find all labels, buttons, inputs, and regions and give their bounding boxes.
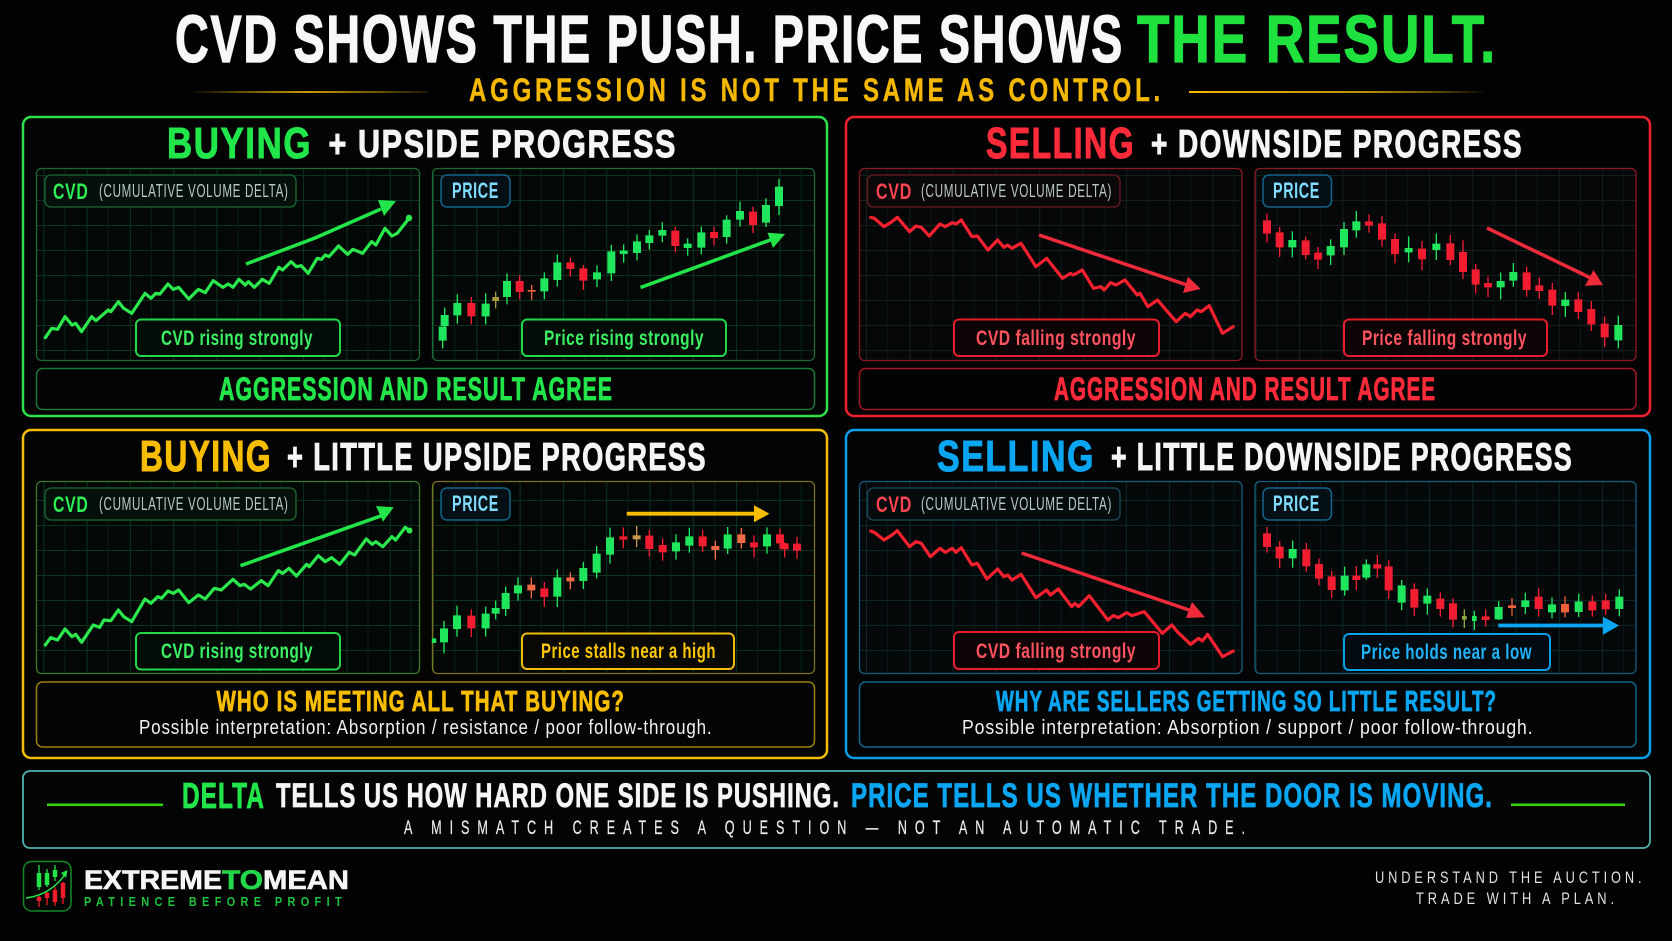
panel: delta takeaway (23, 771, 1650, 848)
logo: ExtremeToMean (24, 862, 349, 911)
arrow: price sideways (627, 505, 770, 522)
CVD line (871, 217, 1233, 333)
badge: PRICE (1263, 175, 1332, 207)
accent line left (47, 804, 163, 806)
label: CVD rising strongly (136, 320, 340, 356)
label: CVD falling strongly (954, 632, 1159, 669)
badge: CVD: (CUMULATIVE VOLUME DELTA) (921, 494, 1112, 514)
arrow: CVD down (1039, 235, 1201, 293)
accent line right (1511, 804, 1625, 806)
heading: buying upside (167, 119, 677, 168)
badge: CVD: (CUMULATIVE VOLUME DELTA) (99, 181, 288, 201)
badge: CVD: (CUMULATIVE VOLUME DELTA) (99, 494, 288, 514)
arrow: CVD up (246, 200, 396, 264)
title: THE RESULT. (1137, 2, 1497, 77)
arrow: price sideways (1498, 617, 1619, 635)
panel: selling + downside progress (846, 117, 1650, 416)
arrow: price down (1487, 228, 1603, 286)
callout: why are sellers getting so little result: Possible interpretation: Absorption / support / poor follow-through. (962, 717, 1534, 739)
arrow: CVD down (1022, 553, 1205, 618)
takeaway headline: TELLS US HOW HARD ONE SIDE IS PUSHING. (276, 777, 840, 815)
heading: selling little downside: SELLING (937, 432, 1095, 481)
chart: price falling (1255, 168, 1636, 360)
wordmark: MEAN (263, 865, 349, 895)
badge: PRICE (1263, 488, 1332, 520)
callout: who is meeting all that buying: WHO IS MEETING ALL THAT BUYING? (216, 686, 625, 718)
label: CVD rising strongly (136, 633, 340, 670)
badge: PRICE: PRICE (452, 491, 499, 516)
callout: who is meeting all that buying (36, 682, 814, 747)
panel: buying + upside progress (23, 117, 827, 416)
chart: price rising (432, 168, 814, 360)
chart: price stalls (432, 482, 814, 674)
badge: CVD: (CUMULATIVE VOLUME DELTA) (921, 181, 1112, 201)
chart: CVD falling (860, 168, 1242, 360)
badge: PRICE: PRICE (1273, 491, 1320, 516)
badge: CVD: CVD (53, 492, 88, 517)
CVD line (45, 527, 412, 645)
heading: buying little upside (140, 432, 707, 481)
wordmark: EXTREME (84, 865, 222, 895)
label: CVD rising strongly: CVD rising strongly (161, 640, 313, 663)
takeaway headline (182, 775, 1493, 816)
label: CVD rising strongly: CVD rising strongly (161, 327, 313, 350)
label: price stalls near a high: Price stalls near a high (541, 640, 716, 663)
badge: PRICE (441, 488, 510, 520)
tagline: PATIENCE BEFORE PROFIT (84, 894, 347, 909)
badge: CVD (45, 488, 296, 520)
heading: buying upside: BUYING (167, 119, 312, 168)
heading: selling little downside (937, 432, 1573, 481)
callout: aggression and result agree (860, 368, 1636, 410)
panel: buying + little upside progress (23, 430, 827, 758)
heading: buying little upside: + LITTLE UPSIDE PROGRESS (287, 436, 707, 479)
label: price rising strongly: Price rising strongly (544, 327, 704, 350)
heading: buying upside: + UPSIDE PROGRESS (328, 123, 677, 166)
takeaway headline: DELTA (182, 775, 265, 816)
callout: aggression and result agree (36, 368, 814, 410)
label: price holds near a low (1344, 634, 1550, 670)
candlesticks: rising (443, 179, 779, 348)
badge: PRICE: PRICE (452, 178, 499, 203)
wordmark (84, 865, 349, 895)
label: price falling strongly (1344, 320, 1547, 356)
chart: CVD rising (36, 168, 420, 360)
badge: PRICE (441, 175, 510, 207)
badge: CVD: CVD (876, 492, 912, 517)
label: price stalls near a high (522, 634, 734, 669)
label: CVD falling strongly: CVD falling strongly (976, 327, 1136, 350)
heading: selling downside: SELLING (986, 119, 1135, 168)
callout: aggression and result agree: AGGRESSION AND RESULT AGREE (1054, 371, 1436, 407)
badge: CVD (868, 175, 1120, 207)
badge: CVD: CVD (53, 179, 88, 204)
badge: CVD: CVD (876, 179, 912, 204)
badge: CVD (45, 175, 296, 207)
label: CVD falling strongly: CVD falling strongly (976, 640, 1136, 663)
CVD line (45, 215, 412, 338)
chart: CVD falling (860, 482, 1242, 674)
label: CVD falling strongly (954, 320, 1159, 356)
callout: why are sellers getting so little result (860, 682, 1636, 747)
panel: selling + little downside progress (846, 430, 1650, 758)
arrow: CVD up (240, 506, 394, 566)
candlesticks: holding (1267, 527, 1619, 630)
candlesticks: falling (1267, 211, 1618, 348)
callout: who is meeting all that buying: Possible interpretation: Absorption / resistance / poor follow-through. (139, 717, 712, 739)
heading: selling downside: + DOWNSIDE PROGRESS (1151, 123, 1523, 166)
CVD line (871, 531, 1233, 657)
label: price holds near a low: Price holds near a low (1361, 641, 1532, 664)
title: CVD SHOWS THE PUSH. PRICE SHOWS (175, 2, 1124, 77)
heading: selling downside (986, 119, 1523, 168)
footer tagline (1375, 868, 1646, 908)
candlesticks: stalling (434, 526, 797, 653)
takeaway subtext: A MISMATCH CREATES A QUESTION — NOT AN AUTOMATIC TRADE. (404, 818, 1253, 839)
subtitle: AGGRESSION IS NOT THE SAME AS CONTROL. (469, 72, 1164, 108)
heading: buying little upside: BUYING (140, 432, 272, 481)
callout: aggression and result agree: AGGRESSION AND RESULT AGREE (219, 371, 613, 407)
badge: PRICE: PRICE (1273, 178, 1320, 203)
chart: price holds (1255, 482, 1636, 674)
label: price falling strongly: Price falling strongly (1362, 327, 1527, 350)
chart: CVD rising (36, 482, 420, 674)
icon: candlesticks logo (24, 862, 71, 911)
label: price rising strongly (522, 320, 726, 356)
arrow: price up (640, 233, 785, 288)
badge: CVD (868, 488, 1120, 520)
wordmark: TO (222, 865, 263, 895)
